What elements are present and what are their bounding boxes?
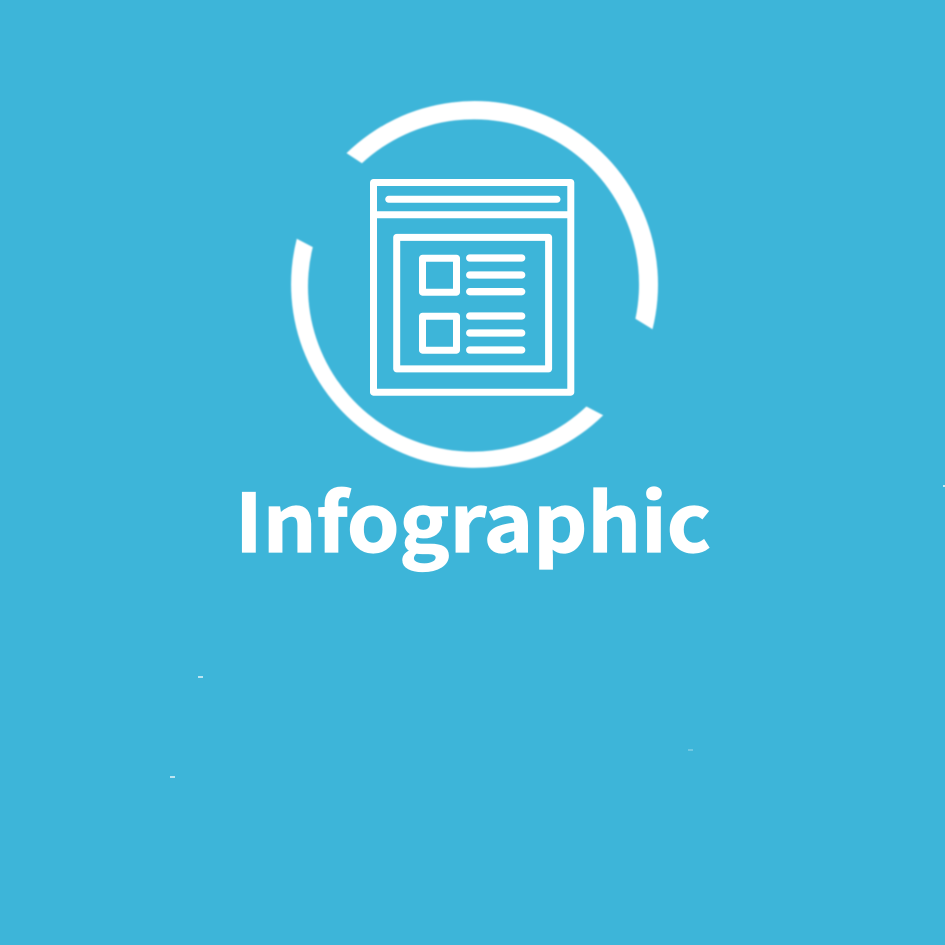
- specks: [170, 485, 945, 778]
- title: Infographic: [235, 460, 711, 576]
- icon: browser window: [374, 182, 571, 392]
- circular ring: [291, 101, 658, 468]
